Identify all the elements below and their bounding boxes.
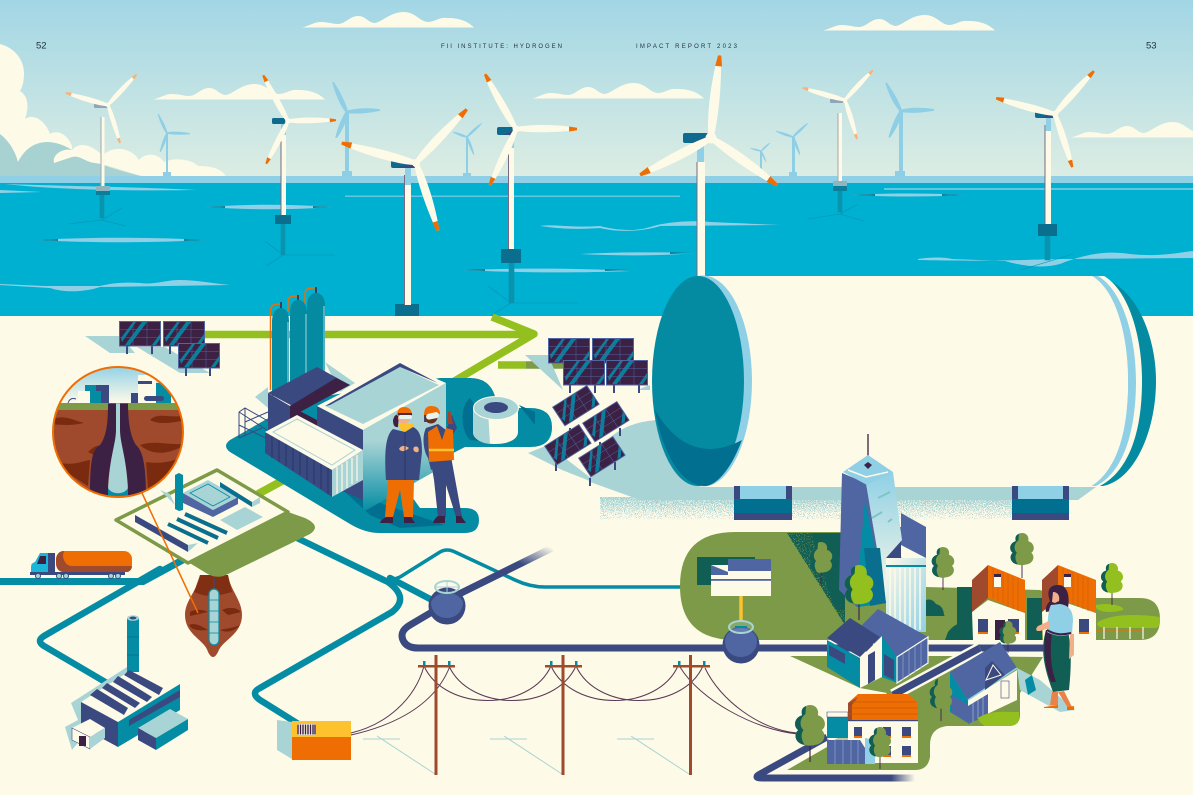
grid building [697, 557, 771, 596]
underground cavern [185, 575, 242, 657]
tank right cap [1090, 276, 1156, 486]
leg right [1012, 486, 1069, 520]
waves [0, 184, 1193, 291]
small tree by road [1000, 621, 1016, 653]
surface buildings [68, 375, 171, 403]
tank left cap [654, 276, 752, 486]
grass strip [58, 403, 178, 410]
silo [473, 396, 518, 444]
pole 1 [418, 655, 455, 775]
tank legs [734, 486, 1069, 520]
lower trees [795, 705, 891, 769]
orange leader line [142, 493, 198, 613]
turbine 3 [340, 106, 470, 317]
turbine 1 [65, 72, 138, 195]
production plant [226, 287, 552, 533]
turbine 7 [995, 69, 1096, 236]
pole shadows [363, 736, 689, 774]
background turbines [157, 81, 934, 177]
well shaft [90, 404, 146, 499]
shadow of tank [590, 420, 1096, 520]
green power lines [200, 317, 565, 494]
blue roof wing [855, 609, 928, 657]
teal pad [226, 378, 552, 533]
bars [220, 482, 252, 507]
turbine: far 6 [884, 82, 934, 177]
worker 2 [424, 406, 466, 523]
shrubs [926, 600, 965, 640]
navy building [268, 367, 350, 455]
header right: IMPACT REPORT 2023 [636, 44, 738, 50]
central slab [183, 480, 238, 517]
page number left: 52 [36, 40, 47, 52]
orange roof villa [827, 694, 918, 764]
green base [188, 512, 315, 577]
generator box [277, 720, 351, 760]
tanker truck [30, 551, 132, 578]
annex right [138, 709, 188, 750]
sky background [0, 0, 1193, 177]
pole 2 [545, 655, 582, 775]
green park [680, 532, 1160, 640]
main building [317, 363, 446, 512]
orange roof house 2 [1042, 565, 1096, 640]
turbine: far 3 [452, 122, 482, 177]
container [265, 415, 363, 497]
yellow feed line [739, 588, 743, 622]
roof bars [90, 670, 163, 715]
pale house shadow [1017, 668, 1075, 712]
tree by blue house [930, 678, 952, 721]
solar array right [525, 338, 650, 486]
page number right: 53 [1146, 40, 1157, 52]
pad shadows [343, 398, 535, 528]
tower [175, 473, 183, 511]
well cross-section circle [50, 365, 186, 499]
side tower [886, 513, 926, 632]
turbine: far 2 [331, 81, 380, 177]
teal shadow patch [1025, 675, 1036, 695]
turbine: far 1 [157, 113, 190, 176]
annex left [72, 719, 105, 749]
turbine reflections [68, 191, 1073, 316]
gas towers [272, 287, 325, 396]
page header [36, 40, 1157, 52]
turbine 6 [802, 68, 875, 191]
upper trees [810, 533, 1123, 620]
valve 2 [722, 621, 760, 664]
stippled shade [787, 533, 845, 625]
orange roof house 1 [972, 565, 1025, 640]
chimney [127, 615, 139, 672]
pole 3 [673, 655, 710, 775]
turbine 5 [638, 55, 780, 287]
tank body [706, 276, 1128, 487]
earth strata [50, 416, 186, 488]
navy pipeline [402, 548, 1045, 648]
turbine: far 4 [776, 122, 808, 177]
factory body [81, 672, 180, 722]
clouds [0, 12, 1193, 177]
valve 1 [428, 581, 466, 624]
dark wave ends [35, 194, 966, 271]
hydrogen storage tank [652, 276, 1156, 487]
turbine: far 5 [750, 142, 770, 177]
woman [1036, 585, 1074, 710]
turbine 2 [260, 74, 336, 224]
plate outline [116, 470, 288, 563]
hydrogen plant plate [116, 470, 315, 577]
teal pipelines [0, 538, 712, 725]
mid houses [827, 609, 928, 688]
leg left [734, 486, 792, 520]
turbine 4 [482, 72, 577, 263]
main pipe over park edge [725, 644, 1045, 652]
factory [65, 615, 188, 750]
blue roof house [950, 642, 1019, 726]
sea [0, 176, 1193, 316]
tower faces [839, 473, 886, 607]
factory shadow [65, 667, 140, 750]
truss frame [239, 408, 275, 440]
wind turbines [65, 55, 1096, 317]
ground [0, 316, 1193, 795]
orange pipes [270, 288, 316, 390]
antenna [867, 434, 869, 460]
solar array left [85, 322, 220, 376]
navy road [757, 648, 980, 778]
skyscraper [839, 434, 926, 632]
header left: FII INSTITUTE: HYDROGEN [441, 44, 562, 50]
pale shadow behind tanks [255, 362, 355, 408]
worker 1 [380, 407, 422, 523]
navy roof [827, 618, 880, 657]
wires [351, 666, 798, 735]
lower neighbourhood ground [787, 656, 1043, 770]
power lines [351, 655, 798, 775]
